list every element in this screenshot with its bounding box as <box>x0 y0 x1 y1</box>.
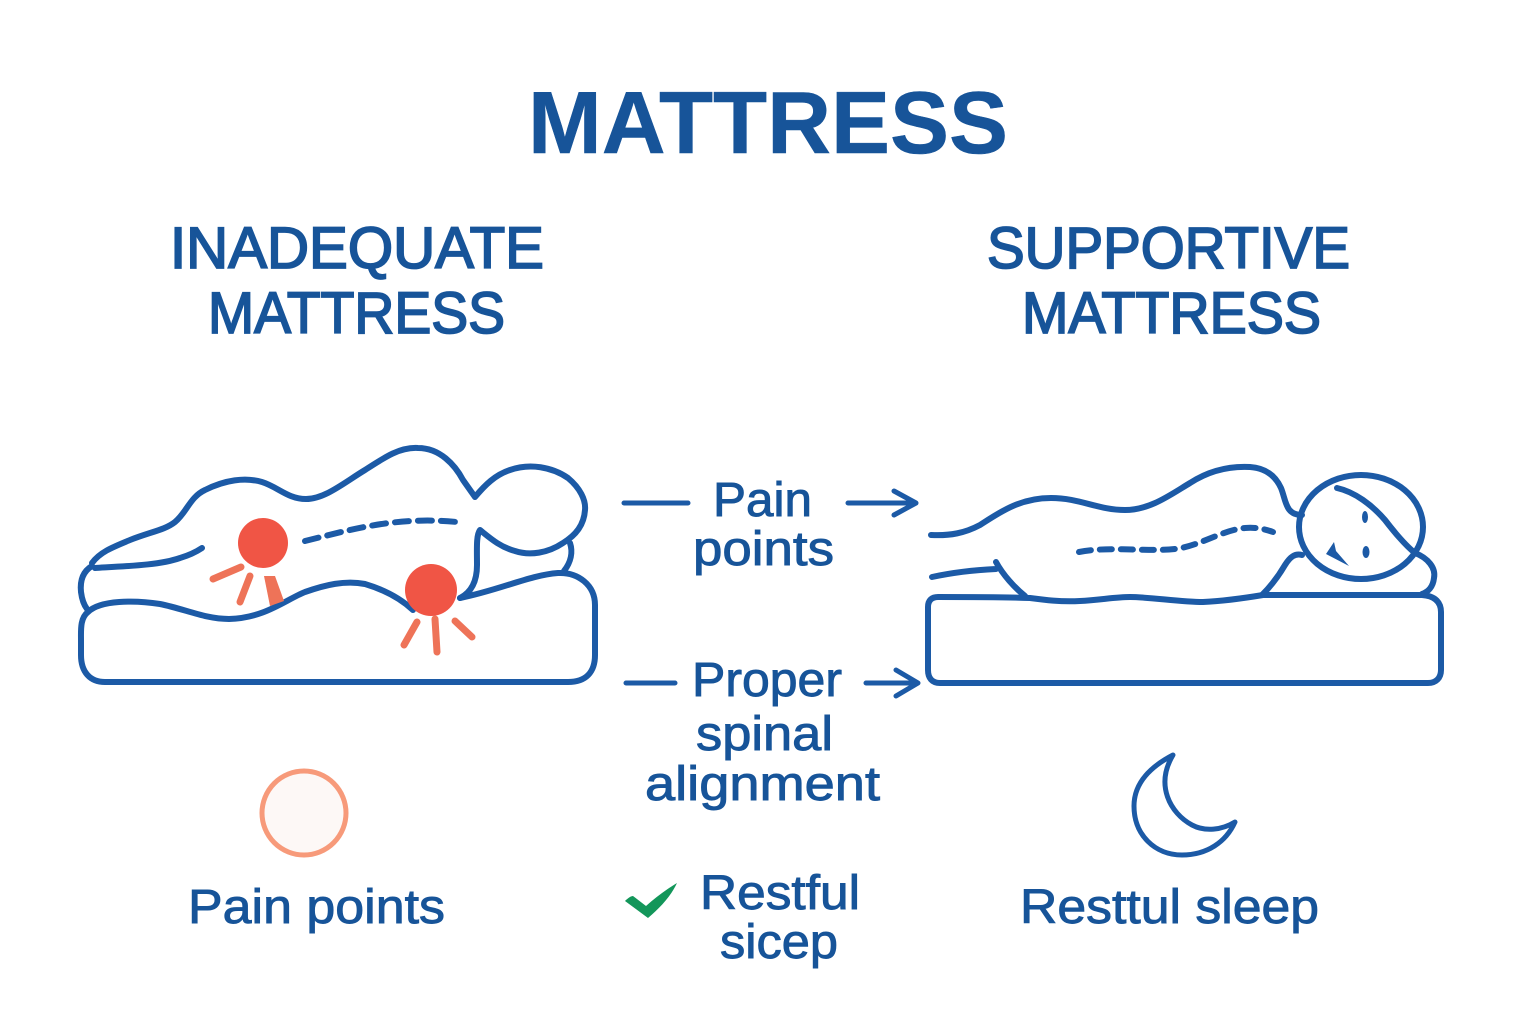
heading: inadequate mattress <box>170 216 544 346</box>
pillow <box>1415 553 1434 594</box>
pain point: back <box>405 564 457 616</box>
shoulder <box>1262 554 1302 595</box>
heading: supportive mattress <box>987 216 1350 346</box>
pillow edge <box>564 543 571 571</box>
illustration: person on inadequate mattress <box>81 448 595 682</box>
illustration: person on supportive mattress <box>928 467 1441 683</box>
pain ray group, back <box>404 619 472 652</box>
arrow: pain points <box>624 491 916 515</box>
center label: pain points: Pain <box>713 474 812 527</box>
center label: pain points: points <box>693 523 834 576</box>
head <box>1299 475 1423 579</box>
center label: restful sleep: Restful <box>700 867 860 920</box>
center label: proper spinal alignment <box>645 654 880 811</box>
sagging mattress <box>81 573 595 682</box>
arm <box>932 562 1025 596</box>
center label: restful sleep <box>700 867 860 969</box>
center label: pain points <box>693 474 834 576</box>
label: restful sleep: Resttul sleep <box>1020 881 1319 934</box>
curved body outline <box>92 448 585 598</box>
leg line <box>95 548 202 568</box>
icon: pain circle <box>262 771 346 855</box>
icon: moon <box>1134 755 1235 855</box>
misaligned spine <box>305 521 457 541</box>
center label: proper spinal alignment: alignment <box>645 758 880 811</box>
pain ray group, hip <box>213 567 284 606</box>
label: pain points: Pain points <box>188 881 445 934</box>
flat mattress <box>928 595 1441 683</box>
pain point: hip <box>238 518 288 568</box>
center label: proper spinal alignment: spinal <box>696 708 833 761</box>
aligned spine <box>1079 528 1273 552</box>
title: MATTRESS <box>528 73 1008 172</box>
heading: supportive mattress: MATTRESS <box>1022 281 1321 346</box>
heading: supportive mattress: SUPPORTIVE <box>987 216 1350 281</box>
heading: inadequate mattress: INADEQUATE <box>170 216 544 281</box>
arrow: proper spinal alignment <box>626 670 918 696</box>
center label: restful sleep: sicep <box>720 916 838 969</box>
center label: proper spinal alignment: Proper <box>692 654 842 707</box>
body outline <box>931 467 1302 535</box>
face <box>1326 511 1370 566</box>
icon: green check <box>625 883 677 918</box>
left body edge <box>81 566 92 609</box>
hair line <box>1337 488 1415 553</box>
heading: inadequate mattress: MATTRESS <box>208 281 505 346</box>
